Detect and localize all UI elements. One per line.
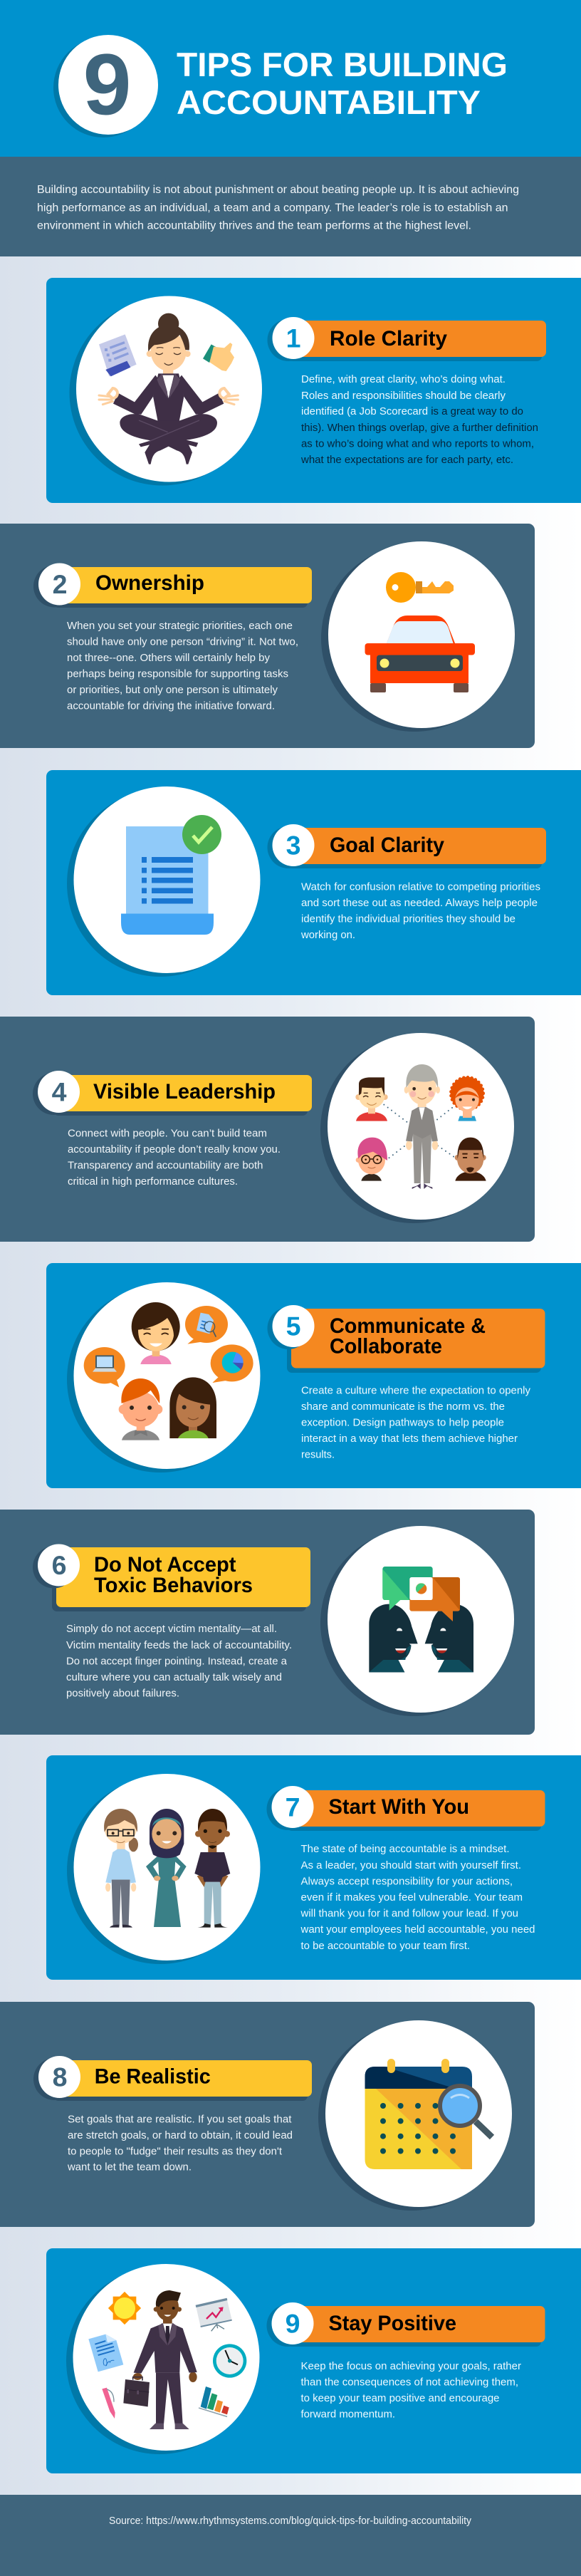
heading bar — [268, 1305, 545, 1373]
heading bar: Role Clarity — [330, 327, 448, 350]
body text: not three--one. Others will certainly help by — [67, 652, 270, 664]
illustration: colleagues talking — [67, 1282, 261, 1473]
body text — [300, 373, 538, 466]
illustration: leader and team — [320, 1033, 514, 1223]
heading bar: 8 — [53, 2062, 67, 2092]
heading bar: Collaborate — [330, 1335, 442, 1358]
person right — [194, 1809, 230, 1928]
body text: accountable for driving the initiative forward. — [67, 700, 275, 712]
body text: this). When things overlap, give a further definition — [301, 422, 538, 434]
woman bottom right — [169, 1377, 216, 1438]
illustration: calendar and magnifier — [318, 2020, 512, 2211]
body text: or priorities, but only one person is ultimately — [67, 684, 278, 696]
body text: Create a culture where the expectation to openly — [301, 1385, 530, 1396]
team member 2 — [451, 1077, 483, 1121]
illustration: two heads talking — [320, 1526, 514, 1716]
body text: Transparency and accountability are both — [68, 1160, 263, 1171]
body text: Watch for confusion relative to competing priorities — [301, 881, 540, 893]
body text — [300, 881, 540, 941]
body text: and sort these out as needed. Always help people — [301, 897, 538, 909]
heading bar: 4 — [52, 1077, 67, 1107]
body text: to people to "fudge" their results as they don't — [68, 2146, 283, 2157]
body text: results. — [301, 1449, 335, 1460]
title — [177, 46, 508, 122]
heading bar: 6 — [52, 1550, 66, 1580]
panel: tip 5 communicate and collaborate — [46, 1263, 581, 1488]
panel: tip 1 role clarity — [46, 278, 581, 503]
body text: are stretch goals, or hard to obtain, it could lead — [68, 2129, 293, 2141]
heading bar: Goal Clarity — [330, 833, 445, 857]
heading bar: Start With You — [329, 1795, 469, 1819]
heading bar: 7 — [286, 1792, 300, 1822]
body text — [300, 1843, 535, 1952]
source text: Source: https://www.rhythmsystems.com/blog/quick-tips-for-building-accountability — [109, 2515, 471, 2527]
body text: Set goals that are realistic. If you set goals that — [68, 2113, 292, 2126]
heading bar — [266, 2302, 545, 2347]
heading bar — [33, 1071, 312, 1116]
body text: The state of being accountable is a mindset. — [300, 1843, 510, 1855]
body text: interact in a way that lets them achieve higher — [301, 1433, 518, 1445]
team member 4 — [455, 1138, 486, 1181]
businessman — [123, 2290, 197, 2429]
document — [88, 2334, 123, 2372]
body text: Keep the focus on achieving your goals, rather — [300, 2360, 521, 2372]
footer band — [0, 2495, 581, 2576]
leader — [404, 1064, 440, 1189]
team member 3 — [356, 1138, 387, 1181]
body text: perhaps being responsible for supporting tasks — [67, 668, 288, 680]
man bottom left — [119, 1378, 162, 1440]
bar chart — [199, 2387, 229, 2416]
panel: tip 2 ownership — [0, 524, 535, 748]
body text: accountability if people don’t really know you. — [68, 1143, 281, 1155]
body text: what the expectations are for each party, etc. — [300, 454, 513, 466]
intro text: Building accountability is not about punishment or about beating people up. It is about achieving — [37, 184, 519, 196]
body text: positively about failures. — [66, 1687, 179, 1700]
body text — [300, 2360, 521, 2421]
body text: identify the individual priorities they should be — [301, 913, 515, 925]
panel: tip 9 stay positive — [46, 2248, 581, 2473]
body text: than the consequences of not achieving them, — [300, 2377, 518, 2388]
title: ACCOUNTABILITY — [177, 84, 481, 122]
sun — [108, 2292, 141, 2325]
body text: to keep your team positive and encourage — [300, 2392, 500, 2404]
body text: even if it makes you feel vulnerable. Your team — [300, 1891, 523, 1904]
body text: should have only one person “driving” it. Not two, — [67, 635, 298, 648]
illustration: meditating woman — [70, 296, 262, 486]
heading bar: Visible Leadership — [93, 1080, 276, 1103]
body text: When you set your strategic priorities, each one — [67, 620, 293, 632]
body text: to be accountable to your team first. — [300, 1940, 470, 1952]
heading bar: 1 — [286, 323, 300, 353]
pen — [102, 2388, 115, 2419]
panel: tip 7 start with you — [46, 1755, 581, 1980]
body text: want your employees held accountable, you need — [300, 1923, 535, 1936]
big number badge: 9 — [83, 36, 131, 133]
speech bubbles — [84, 1306, 253, 1387]
body text: share and communicate is the norm vs. the — [301, 1401, 505, 1413]
body text: will thank you for it and follow your lead. If you — [300, 1908, 518, 1919]
body text — [66, 1623, 292, 1700]
body text — [301, 1385, 530, 1460]
body text: Do not accept finger pointing. Instead, create a — [66, 1656, 288, 1667]
body text: Define, with great clarity, who’s doing what. — [301, 373, 506, 385]
body text: Roles and responsibilities should be clearly — [301, 390, 506, 402]
team member 1 — [355, 1077, 388, 1121]
body text: forward momentum. — [300, 2408, 395, 2421]
intro band — [0, 157, 581, 256]
woman top — [132, 1302, 180, 1364]
illustration: key and car — [321, 541, 515, 732]
heading bar — [268, 824, 546, 868]
body text: culture where you can actually talk wisely and — [66, 1671, 282, 1683]
body text — [68, 1127, 281, 1188]
body text: want to let the team down. — [67, 2161, 192, 2173]
body text: Connect with people. You can’t build team — [68, 1127, 267, 1140]
header band — [0, 0, 581, 157]
body text: working on. — [300, 929, 355, 941]
big number badge — [53, 35, 158, 137]
body text: Victim mentality feeds the lack of accountability. — [66, 1639, 292, 1651]
clock — [213, 2344, 246, 2378]
body text — [67, 620, 298, 712]
heading bar: Ownership — [95, 571, 204, 595]
heading bar: Be Realistic — [95, 2065, 211, 2089]
heading bar — [268, 317, 546, 361]
body text: identified (a Job Scorecard is a great way to do — [301, 405, 523, 417]
body text: critical in high performance cultures. — [68, 1175, 238, 1188]
intro text: environment in which accountability thrives and the team performs at the highest level. — [37, 219, 471, 232]
body text: As a leader, you should start with yourself first. — [300, 1859, 521, 1871]
heading bar: 5 — [286, 1311, 300, 1341]
title: TIPS FOR BUILDING — [177, 46, 508, 84]
heading bar: Communicate & — [330, 1314, 486, 1338]
heading bar — [266, 1786, 545, 1831]
heading bar: 3 — [286, 831, 300, 861]
body text: Always accept responsibility for your actions, — [300, 1875, 513, 1888]
panel: tip 4 visible leadership — [0, 1017, 535, 1242]
panel: tip 8 be realistic — [0, 2002, 535, 2227]
panel: tip 6 do not accept toxic behaviors — [0, 1510, 535, 1735]
heading bar: Toxic Behaviors — [94, 1574, 253, 1597]
flip chart — [196, 2299, 232, 2331]
body text: Simply do not accept victim mentality—at all. — [66, 1623, 277, 1635]
illustration: three people — [67, 1774, 261, 1964]
intro text: high performance as an individual, a team and a company. The leader’s role is to establish an — [37, 202, 508, 214]
heading bar: Do Not Accept — [94, 1553, 236, 1577]
person left — [104, 1809, 138, 1928]
heading bar: 2 — [53, 569, 67, 599]
heading bar: 9 — [286, 2308, 300, 2338]
heading bar: Stay Positive — [329, 2312, 456, 2335]
illustration: checked document — [67, 786, 261, 977]
illustration: businessman and icons — [66, 2264, 259, 2454]
heading bar — [33, 2056, 312, 2101]
intro text — [37, 184, 519, 232]
person centre — [146, 1809, 187, 1927]
body text: exception. Design pathways to help people — [301, 1416, 504, 1429]
body text: as to who’s doing what and who reports to whom, — [301, 437, 534, 450]
heading bar — [33, 1544, 310, 1611]
panel: tip 3 goal clarity — [46, 770, 581, 995]
body text — [67, 2113, 293, 2173]
heading bar — [33, 563, 312, 608]
